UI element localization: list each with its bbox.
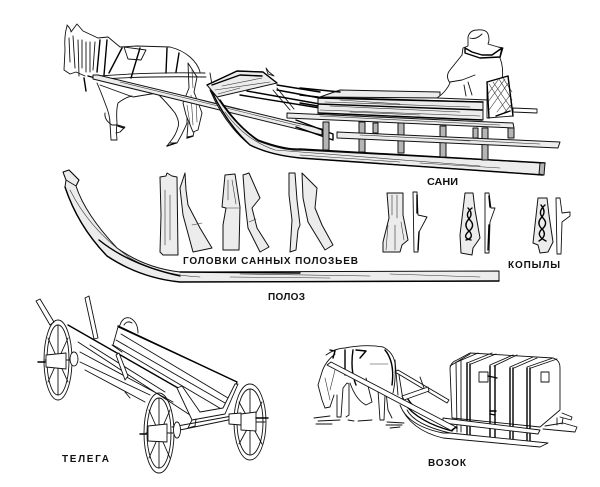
head 3 [222,174,240,250]
box body [450,353,560,442]
illustration: horse-drawn sleigh [64,24,560,175]
runners and shafts [327,362,548,447]
far wheel [119,318,138,333]
driver in fur coat [437,30,503,100]
stake D [485,193,495,253]
label: runner: ПОЛОЗ [268,292,305,303]
kopyly stakes [383,192,570,255]
back left wheel [38,320,78,400]
label: stakes: КОПЫЛЫ [508,260,560,271]
label: sani: САНИ [427,177,458,188]
illustration: telega cart [36,296,268,473]
cart body [68,325,238,430]
horse [64,24,206,146]
label: vozok: ВОЗОК [428,458,467,469]
head 6 [302,173,333,250]
label: telega: ТЕЛЕГА [62,454,109,465]
illustration: vozok covered sleigh [314,346,577,447]
poles [36,296,98,339]
stake C with knot ornament [460,193,480,255]
runner heads [160,173,333,255]
stake B [413,192,427,252]
sleigh body and seat [287,88,560,160]
ground scribbles [314,416,404,428]
shaft [93,68,322,135]
head 5 [289,173,300,252]
head 1 [160,173,178,255]
illustration: sleigh runner [63,170,499,282]
lattice seat back [487,76,513,118]
far runner [543,413,577,432]
label: runner heads: ГОЛОВКИ САННЫХ ПОЛОЗЬЕВ [183,256,358,267]
near front wheel [140,393,180,473]
stake E with knot ornament [533,198,553,253]
right wheel [229,384,268,460]
horse head down [318,346,403,420]
head 2 [180,173,212,252]
stake A [383,193,408,252]
stake F [556,198,570,254]
head 4 [243,173,269,252]
sleigh runner curved [210,90,545,175]
